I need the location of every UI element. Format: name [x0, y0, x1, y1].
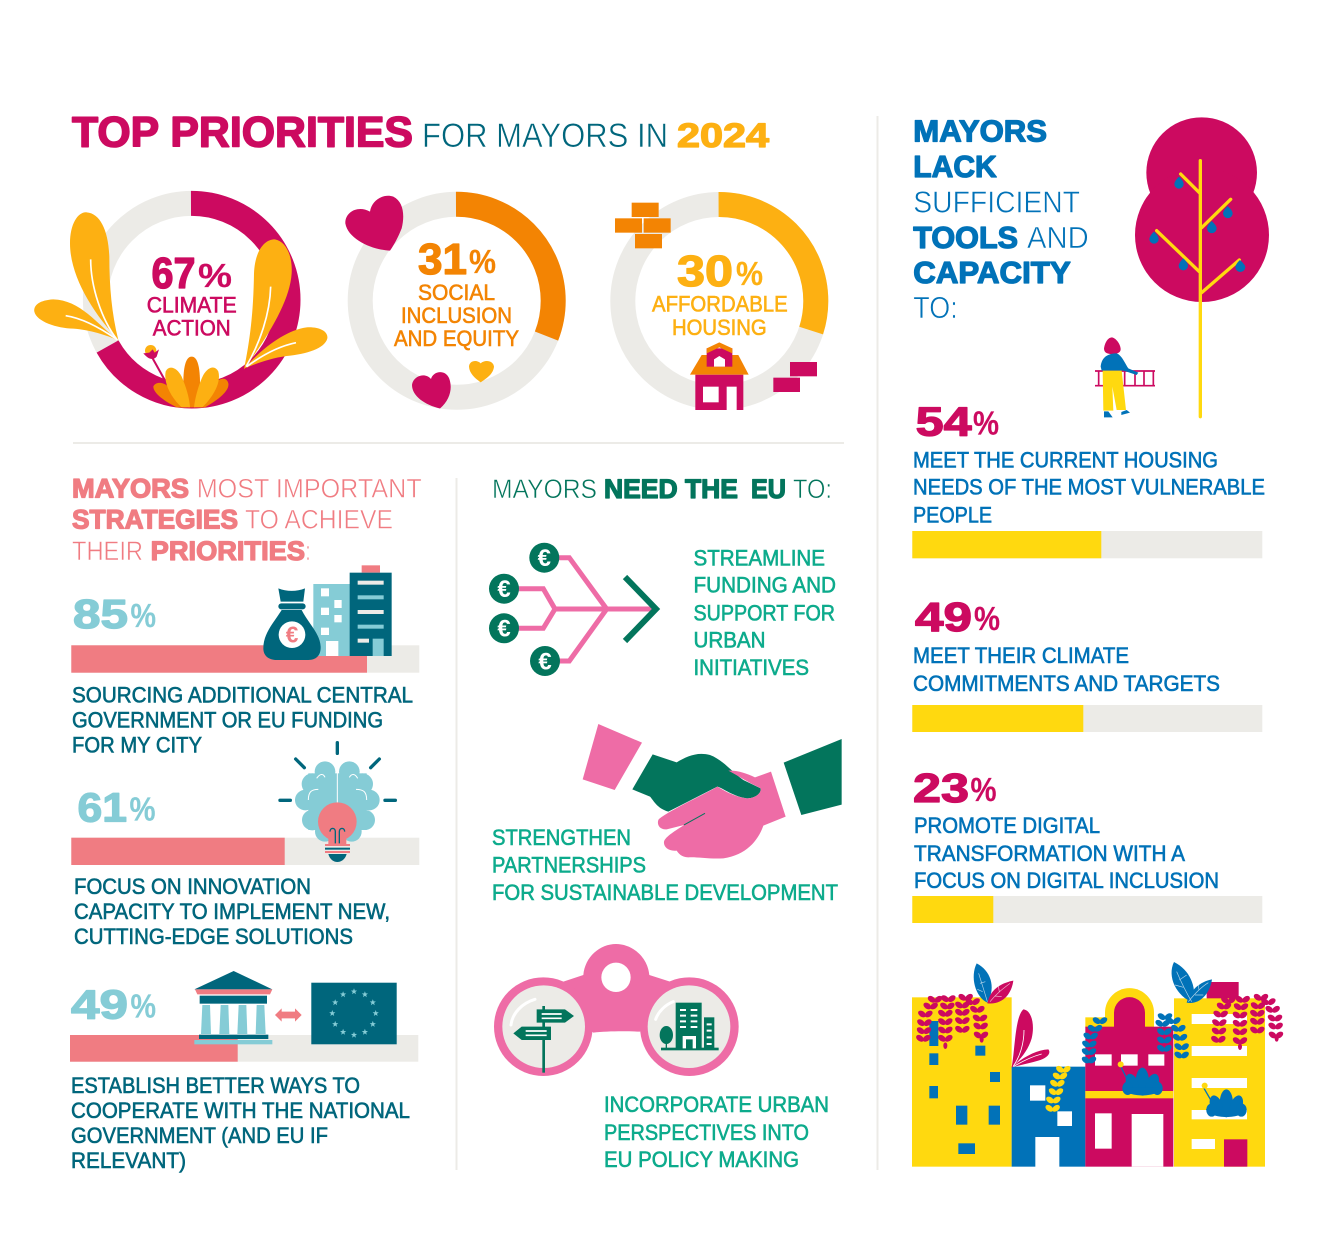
heading: mayors lack tools: AND: [1027, 220, 1089, 255]
statistic: 67% climate action: ACTION: [153, 316, 231, 341]
icon: large heart: [345, 196, 403, 251]
label: climate: MEET THEIR CLIMATE: [913, 643, 1129, 668]
statistic: 67% climate action: 67: [152, 249, 196, 298]
bar chart: 54%: [912, 531, 1262, 558]
icon: house: [690, 342, 749, 410]
building: yellow right: [1174, 982, 1265, 1167]
icon: small yellow heart: [469, 361, 494, 382]
statistic: 30% affordable housing: %: [736, 255, 763, 292]
label: innovation: CAPACITY TO IMPLEMENT NEW,: [74, 899, 390, 924]
icon: leaves and flower: [34, 212, 327, 407]
heading: strategies: THEIR: [72, 536, 143, 566]
panel: climate action donut: [34, 203, 327, 407]
vines: pink left: [915, 993, 990, 1049]
heading: mayors need the EU: TO:: [793, 474, 832, 504]
statistic: 67% climate action: CLIMATE: [147, 293, 237, 318]
percentage: 49%: [71, 981, 156, 1027]
heading: mayors lack tools: TOOLS: [913, 220, 1018, 255]
leaves: left roof: [974, 963, 1013, 1003]
icon: money bag and buildings: €: [286, 622, 299, 648]
icon: pink bricks: [773, 362, 817, 392]
percentage: 85%: [73, 591, 156, 637]
heading: mayors lack tools: TO:: [913, 290, 958, 325]
label: streamline: INITIATIVES: [694, 655, 809, 680]
stat: 49% climate commitments: [912, 594, 1262, 732]
heading: mayors lack tools: CAPACITY: [913, 255, 1071, 290]
icon: euro funding streams: [489, 543, 656, 676]
label: funding: GOVERNMENT OR EU FUNDING: [72, 708, 383, 732]
icon: small pink heart: [412, 372, 451, 408]
percentage: 49%: [915, 594, 1000, 640]
icon: euro funding streams: €: [538, 648, 552, 675]
label: digital: TRANSFORMATION WITH A: [914, 841, 1185, 866]
label: digital: PROMOTE DIGITAL: [914, 813, 1100, 838]
percentage: 61%: %: [130, 791, 156, 828]
statistic: 67% climate action: %: [198, 257, 232, 294]
label: streamline: STREAMLINE: [694, 546, 825, 571]
label: urban perspectives: PERSPECTIVES INTO: [604, 1120, 809, 1145]
statistic: 31% social inclusion: %: [469, 243, 496, 280]
percentage: 61%: 61: [78, 785, 127, 831]
building: pink domed: [1085, 988, 1173, 1167]
label: climate: [913, 643, 1220, 696]
label: partnerships: PARTNERSHIPS: [492, 852, 646, 878]
strategy: 49% cooperation: [70, 971, 418, 1173]
title: FOR MAYORS IN: [422, 117, 668, 155]
heading: strategies: TO ACHIEVE: [245, 504, 393, 534]
icon: euro funding streams: €: [497, 576, 511, 603]
plant: blue bush on yellow building: [1202, 1083, 1247, 1118]
label: streamline: SUPPORT FOR: [694, 601, 835, 626]
percentage: 61%: [78, 785, 156, 831]
illustration: green city: [912, 962, 1285, 1167]
percentage: 54%: %: [973, 405, 999, 442]
percentage: 49%: 49: [71, 981, 128, 1027]
need: streamline funding: [489, 543, 836, 680]
label: cooperation: ESTABLISH BETTER WAYS TO: [71, 1073, 360, 1098]
label: cooperation: COOPERATE WITH THE NATIONAL: [71, 1098, 410, 1123]
bar chart: 85%: [71, 645, 419, 673]
heading: mayors lack tools: [913, 114, 1089, 325]
label: funding: SOURCING ADDITIONAL CENTRAL: [72, 683, 413, 708]
statistic: 30% affordable housing: 30: [677, 247, 733, 296]
plant: blue bush on pink building: [1118, 1061, 1163, 1096]
heading: mayors need the EU: [492, 474, 832, 504]
icon: orange bricks: [615, 203, 671, 248]
icon: binoculars: [494, 944, 739, 1076]
heading: strategies: MOST IMPORTANT: [197, 474, 422, 504]
label: urban perspectives: [604, 1092, 829, 1172]
need: urban perspectives: [494, 944, 829, 1172]
title: [72, 108, 769, 156]
heading: strategies: MAYORS: [72, 474, 189, 504]
strategy: 85% funding: [71, 565, 419, 758]
label: innovation: CUTTING-EDGE SOLUTIONS: [74, 924, 353, 949]
need: partnerships: [492, 724, 842, 905]
label: innovation: [74, 874, 390, 949]
stat: 54% housing needs: [912, 399, 1265, 558]
statistic: 31% social inclusion: [394, 235, 519, 351]
label: cooperation: [71, 1073, 410, 1173]
label: housing: NEEDS OF THE MOST VULNERABLE: [913, 474, 1265, 500]
icon: double arrow: [275, 1008, 302, 1022]
heading: mayors lack tools: MAYORS: [913, 114, 1047, 149]
heading: mayors lack tools: LACK: [913, 149, 997, 184]
title: 2024: [677, 117, 769, 155]
icon: person with ladder: [1095, 337, 1155, 417]
title: TOP PRIORITIES: [72, 108, 413, 156]
label: partnerships: FOR SUSTAINABLE DEVELOPMENT: [492, 880, 838, 905]
statistic: 67% climate action: [147, 249, 237, 341]
stat: 23% digital transformation: [912, 765, 1262, 923]
vines: pink right: [1210, 993, 1285, 1050]
heading: strategies: :: [306, 536, 310, 566]
label: housing: [913, 448, 1265, 527]
label: funding: [72, 683, 413, 758]
percentage: 54%: 54: [916, 399, 972, 445]
label: innovation: FOCUS ON INNOVATION: [74, 874, 311, 899]
panel: social inclusion donut: [345, 196, 553, 408]
percentage: 85%: %: [130, 597, 156, 634]
icon: EU flag: [311, 983, 397, 1044]
icon: handshake: [583, 724, 842, 859]
heading: mayors need the EU: EU: [751, 474, 786, 504]
percentage: 23%: 23: [913, 765, 969, 811]
bar chart: 49%: [70, 1035, 418, 1062]
percentage: 23%: [913, 765, 996, 811]
label: partnerships: [492, 825, 838, 905]
statistic: 31% social inclusion: AND EQUITY: [394, 326, 519, 351]
percentage: 49%: 49: [915, 594, 972, 640]
leaves: right roof: [1172, 962, 1212, 1003]
percentage: 54%: [916, 399, 999, 445]
statistic: 31% social inclusion: 31: [418, 235, 467, 284]
label: cooperation: RELEVANT): [71, 1148, 186, 1173]
label: streamline: FUNDING AND: [694, 573, 836, 598]
icon: money bag and buildings: [263, 565, 392, 660]
label: housing: MEET THE CURRENT HOUSING: [913, 448, 1218, 473]
statistic: 31% social inclusion: SOCIAL: [418, 280, 495, 305]
heading: strategies: PRIORITIES: [151, 536, 305, 566]
bar chart: 23%: [912, 896, 1262, 923]
label: streamline: URBAN: [694, 628, 766, 652]
strategy: 61% innovation: [71, 743, 419, 949]
heading: mayors lack tools: SUFFICIENT: [913, 185, 1080, 220]
heading: strategies: STRATEGIES: [72, 504, 238, 534]
vine: yellow: [1044, 1065, 1072, 1113]
statistic: 30% affordable housing: AFFORDABLE: [652, 292, 788, 317]
label: funding: FOR MY CITY: [72, 733, 202, 758]
icon: tree: [1135, 117, 1269, 417]
percentage: 49%: %: [974, 600, 1000, 637]
label: housing: PEOPLE: [913, 502, 992, 527]
label: urban perspectives: INCORPORATE URBAN: [604, 1092, 829, 1117]
label: climate: COMMITMENTS AND TARGETS: [913, 671, 1220, 696]
building: blue: [1012, 1067, 1085, 1167]
statistic: 30% affordable housing: HOUSING: [672, 315, 767, 340]
label: cooperation: GOVERNMENT (AND EU IF: [71, 1123, 328, 1148]
heading: mayors need the EU: NEED THE: [604, 474, 738, 504]
bar chart: 49%: [912, 705, 1262, 732]
label: digital: FOCUS ON DIGITAL INCLUSION: [914, 868, 1219, 893]
label: urban perspectives: EU POLICY MAKING: [604, 1147, 799, 1172]
label: streamline: [694, 546, 836, 680]
label: digital: [914, 813, 1219, 893]
building: yellow left: [912, 997, 1012, 1167]
bar chart: 61%: [71, 838, 419, 865]
percentage: 85%: 85: [73, 591, 128, 637]
icon: government building: [194, 971, 272, 1044]
heading: strategies: [72, 474, 422, 566]
percentage: 23%: %: [970, 771, 996, 808]
statistic: 30% affordable housing: [652, 247, 788, 340]
plant: pink on blue building: [1012, 1009, 1049, 1067]
percentage: 49%: %: [130, 987, 156, 1024]
panel: affordable housing donut: [615, 203, 817, 410]
statistic: 31% social inclusion: INCLUSION: [401, 303, 512, 328]
vines: blue: [1080, 1012, 1190, 1065]
label: partnerships: STRENGTHEN: [492, 825, 631, 850]
icon: brain and light bulb: [280, 743, 395, 862]
icon: euro funding streams: €: [538, 545, 551, 572]
icon: euro funding streams: €: [497, 616, 511, 643]
heading: mayors need the EU: MAYORS: [492, 474, 597, 504]
